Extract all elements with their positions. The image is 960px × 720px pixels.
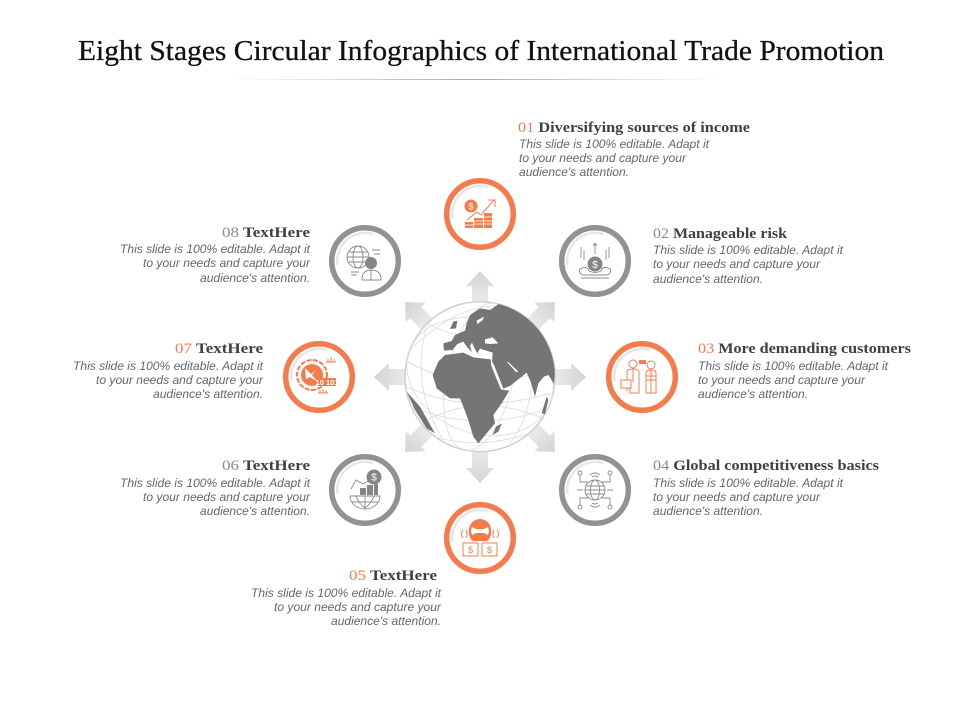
title: Eight Stages Circular Infographics of International Trade Promotion xyxy=(78,35,884,67)
text: stage 4: This slide is 100% editable. Adapt it xyxy=(653,476,844,490)
text: stage 1: to your needs and capture your xyxy=(519,151,687,165)
text: stage 1: 01 Diversifying sources of income xyxy=(518,120,751,136)
stage 8 ring and icon xyxy=(332,228,398,294)
text: stage 5 xyxy=(251,568,442,628)
text: stage 7: to your needs and capture your xyxy=(96,373,264,387)
text: stage 2: 02 Manageable risk xyxy=(653,226,788,242)
stage 2 ring and icon xyxy=(562,228,628,294)
text: stage 1: audience's attention. xyxy=(519,165,629,179)
stage 5 ring and icon: $ xyxy=(487,545,492,555)
text: stage 7: This slide is 100% editable. Adapt it xyxy=(73,359,264,373)
text: stage 3: This slide is 100% editable. Adapt it xyxy=(698,359,889,373)
text: stage 2: to your needs and capture your xyxy=(653,257,821,271)
stage 4 ring and icon xyxy=(562,457,628,523)
text: stage 8: to your needs and capture your xyxy=(143,256,311,270)
text: stage 8: audience's attention. xyxy=(200,271,310,285)
text: stage 2 xyxy=(653,226,844,286)
text: stage 2: This slide is 100% editable. Adapt it xyxy=(653,243,844,257)
text: stage 6: 06 TextHere xyxy=(222,458,311,474)
arrows radiating from globe xyxy=(374,271,586,483)
text: stage 5: audience's attention. xyxy=(331,614,441,628)
text: stage 7 xyxy=(73,341,264,401)
text: stage 6 xyxy=(120,458,311,518)
stage 5 ring and icon xyxy=(447,505,513,571)
text: stage 6: to your needs and capture your xyxy=(143,490,311,504)
text: stage 8: This slide is 100% editable. Adapt it xyxy=(120,242,311,256)
stage 6 ring and icon xyxy=(332,457,398,523)
text: stage 5: 05 TextHere xyxy=(349,568,438,584)
text: stage 8: 08 TextHere xyxy=(222,225,311,241)
stage 6 ring and icon: $ xyxy=(371,472,377,484)
stage 1 ring and icon xyxy=(447,181,513,247)
text: stage 1: This slide is 100% editable. Adapt it xyxy=(519,137,710,151)
text: stage 3: audience's attention. xyxy=(698,387,808,401)
text: stage 2: audience's attention. xyxy=(653,272,763,286)
text: stage 3 xyxy=(698,341,911,401)
text: stage 6: This slide is 100% editable. Adapt it xyxy=(120,476,311,490)
text: stage 6: audience's attention. xyxy=(200,504,310,518)
stage 3 ring and icon xyxy=(609,344,675,410)
text: stage 3: 03 More demanding customers xyxy=(698,341,911,357)
text: stage 4: to your needs and capture your xyxy=(653,490,821,504)
stage 5 ring and icon: $ xyxy=(468,545,473,555)
text: stage 4: audience's attention. xyxy=(653,504,763,518)
text: stage 7: 07 TextHere xyxy=(175,341,264,357)
text: stage 5: to your needs and capture your xyxy=(274,600,442,614)
text: stage 4 xyxy=(653,458,879,518)
text: stage 1 xyxy=(518,120,751,179)
stage 7 ring and icon: 10 101 xyxy=(316,378,338,387)
globe xyxy=(404,301,556,452)
text: stage 5: This slide is 100% editable. Adapt it xyxy=(251,586,442,600)
stage 1 ring and icon: $ xyxy=(468,202,474,212)
text: stage 3: to your needs and capture your xyxy=(698,373,866,387)
text: stage 7: audience's attention. xyxy=(153,387,263,401)
stage 2 ring and icon: $ xyxy=(592,260,598,271)
text: stage 4: 04 Global competitiveness basics xyxy=(653,458,879,474)
text: stage 8 xyxy=(120,225,311,285)
stage 7 ring and icon xyxy=(286,344,352,410)
